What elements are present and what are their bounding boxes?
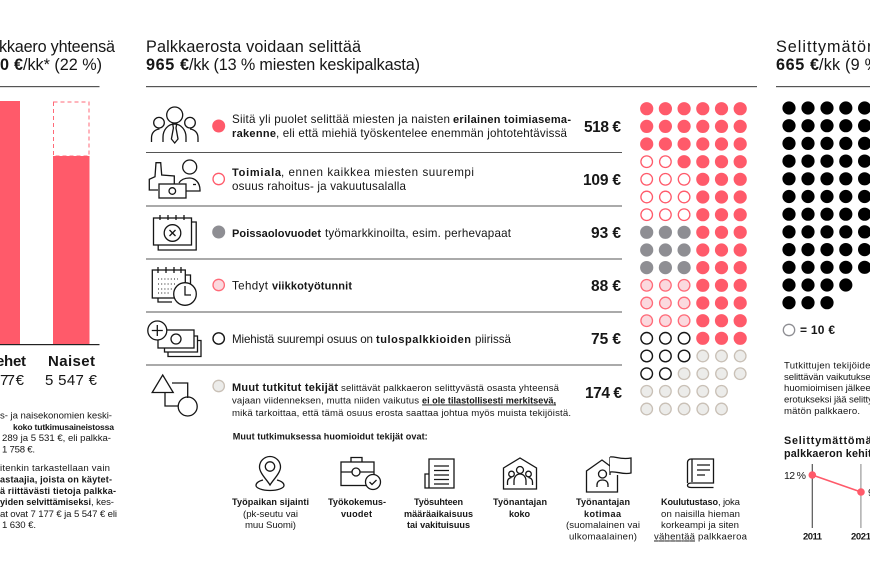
icon: calendar with cross [154,215,196,250]
text block: explanation: at ovat 7 177 € ja 5 547 € eli [0,509,117,520]
icon: people with tie [152,107,198,143]
text block: explanation: 1 758 €. [2,444,35,456]
factor: workplace location: Työpaikan sijainti [232,497,309,507]
bullet: pink [213,279,224,291]
factor: education: palkkaeroa [698,532,748,542]
bullet: red [212,120,225,132]
text block: explanation: koko tutkimusaineistossa [13,422,114,432]
factor: contract type: tai vakituisuus [407,520,470,530]
row text: other factors: selittävät palkkaeron selittyvästä osasta yhteensä [341,383,560,394]
heading: total pay gap: kkaero yhteensä [0,38,115,56]
row text: occupation structure [232,113,571,140]
line chart: 2011 to 2021: 12 % [784,470,806,482]
text block: explanation: itenkin tarkastellaan vain [0,463,110,474]
factor: work experience: Työkokemus- [328,497,386,507]
factor: employer country: kotimaa [584,509,622,519]
factor: education [654,459,748,542]
row text: performance pay [232,333,512,346]
heading: explained gap: Palkkaerosta voidaan selittää [146,38,361,56]
panel: unexplained gap [776,38,870,542]
factor: education: , joka [718,497,741,508]
icon: map pin [256,457,284,490]
bar label: women: 5 547 € [45,372,98,389]
bar label: women [45,353,98,389]
row text: absence: työmarkkinoilta, esim. perhevapaat [325,227,512,240]
icon: book [688,459,714,488]
text block: explanation: 1 630 €. [2,520,36,531]
bar label: men: 77 € [0,372,25,389]
icon: money and plus [148,321,201,356]
subheading: unexplained trend [784,435,870,460]
row text: weekly hours [232,280,352,292]
factor: education: vähentää [654,532,696,542]
row text: performance pay: Miehistä suurempi osuus on [232,333,373,346]
row text: absence: Poissaolovuodet [232,228,321,240]
factor: contract type [404,459,473,530]
factor: workplace location [232,457,309,531]
icon: shapes [152,375,197,416]
icon: calendar with clock [152,267,196,305]
heading: explained gap [146,38,420,74]
row text: industry [232,166,474,193]
panel: total pay gap [0,38,117,531]
value: 109: 109 € [583,172,621,189]
row text: other factors: Muut tutkitut tekijät [232,382,338,394]
icon: document [425,459,454,488]
factor: employer size [493,458,547,519]
legend: one dot is ten euros: = 10 € [800,323,835,337]
row text: industry: , ennen kaikkea miesten suurempi [281,166,474,179]
row text: other factors: mikä tarkoittaa, että tämä osuus erosta saattaa johtua myös muista tekijöistä. [232,408,571,419]
subheading: other factors considered: Muut tutkimuksessa huomioidut tekijät ovat: [233,432,428,442]
factor: employer size: koko [509,509,530,519]
text block: explanation: yiden selvittämiseksi [0,497,91,507]
text block: explanation: astaajia, joista on käytet- [0,474,112,484]
text block: explanation: , kes- [91,497,114,508]
row text: occupation structure: Siitä yli puolet selittää miesten ja naisten [232,113,450,126]
value: 518: 518 € [584,119,621,136]
factor: employer country [566,457,640,542]
row text: industry: osuus rahoitus- ja vakuutusalalla [232,180,407,193]
dot matrix: unexplained gap [782,101,870,309]
factor: education: Koulutustaso [661,497,718,507]
row text: other factors [232,382,571,419]
icon: house with people [504,458,536,489]
factor: education: on naisilla hieman [661,509,740,520]
factor: employer country: ulkomaalainen) [569,532,637,542]
text block: explanation: s- ja naisekonomien keski- [0,410,112,422]
line chart: 2011 to 2021: 2011 [803,532,823,542]
icon: briefcase with check [341,458,380,490]
text block: unexplained explanation [784,360,870,417]
factor: employer country: (suomalainen vai [566,520,640,531]
bullet: gray [212,226,225,238]
text block: explanation: ä riittävästi tietoja palkka- [0,486,116,496]
row text: occupation structure: erilainen toimiasema- [453,114,571,126]
row text: weekly hours: Tehdyt [232,280,269,292]
heading: total pay gap [0,38,115,74]
row text: industry: Toimiala [232,167,282,179]
factor: employer size: Työnantajan [493,497,547,507]
row text: performance pay: piirissä [475,333,512,346]
value: 174: 174 € [585,385,622,402]
bar label: men [0,353,26,389]
line chart: 2011 to 2021 [784,464,870,542]
row text: absence [232,227,512,240]
legend: one dot is ten euros [783,323,835,337]
factor: workplace location: muu Suomi) [245,520,296,531]
row text: occupation structure: rakenne [232,128,276,140]
row text: other factors: ei ole tilastollisesti merkitsevä, [422,396,556,406]
factor: work experience [328,458,386,519]
panel: explained gap [146,38,757,542]
bullet: black ring [213,333,224,344]
factor: work experience: vuodet [341,509,372,519]
row text: performance pay: tulospalkkioiden [376,334,471,346]
factor: workplace location: (pk-seutu vai [243,509,298,520]
text block: explanation [0,410,117,531]
value: 88: 88 € [591,278,621,295]
factor: employer country: Työnantajan [576,497,630,507]
heading: unexplained gap [776,38,870,74]
text block: explanation: 289 ja 5 531 €, eli palkka- [2,433,111,444]
dot matrix: explained gap [640,102,747,415]
row text: other factors: vajaan viidenneksen, mutta niiden vaikutus [232,396,419,406]
text block: unexplained explanation: mätön palkkaero. [784,406,860,417]
factor: education: korkeampi ja siten [661,520,739,531]
bar label: women: Naiset [48,353,95,370]
bullet: red ring [213,173,224,185]
row text: weekly hours: viikkotyötunnit [272,280,352,292]
heading: total pay gap: /kk* (22 %) [23,56,102,74]
bar chart: men and women [0,101,100,345]
heading: total pay gap: 0 € [0,56,23,74]
heading: explained gap: 965 € [146,56,189,74]
factor: contract type: Työsuhteen [414,497,463,507]
factor: contract type: määräaikaisuus [404,509,473,519]
icon: house with flag [586,457,631,492]
value: 75: 75 € [591,331,621,348]
value: 93: 93 € [591,225,621,242]
bullet: beige [213,380,224,392]
heading: unexplained gap: 665 € [776,56,819,74]
heading: explained gap: /kk (13 % miesten keskipalkasta) [189,56,420,74]
row text: occupation structure: , eli että miehiä työskentelee enemmän johtotehtävissä [276,127,568,140]
icon: factory and person [149,160,200,198]
